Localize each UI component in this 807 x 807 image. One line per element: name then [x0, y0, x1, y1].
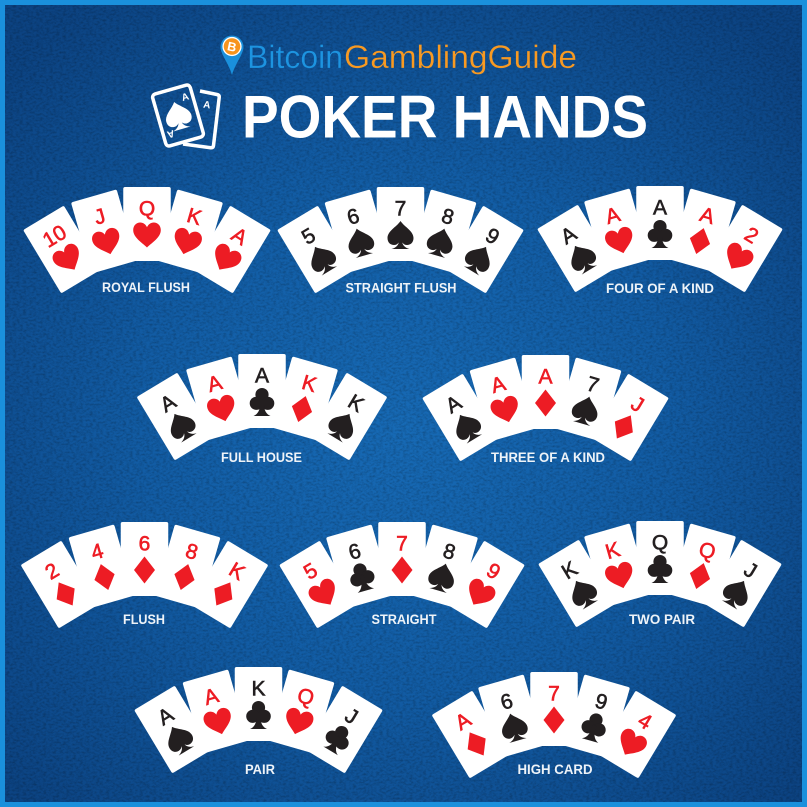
cards: three of a kind	[422, 355, 669, 461]
card: A of hearts: A	[201, 684, 221, 710]
card: 8 of spades	[410, 189, 477, 274]
card: 9 of clubs	[564, 674, 630, 759]
card: A of diamonds	[522, 355, 569, 429]
card: Q of hearts: Q	[295, 684, 317, 710]
cards: royal flush	[23, 187, 271, 293]
hand: high card	[432, 672, 676, 778]
card: 6 of diamonds: 6	[139, 532, 150, 556]
card: 4 of diamonds: 4	[89, 539, 106, 565]
card: 6 of spades: 6	[345, 204, 362, 230]
card: A of hearts	[182, 669, 249, 754]
hand: full house	[137, 354, 387, 465]
icon: map pin with bitcoin coin: B	[226, 39, 238, 55]
icon: playing cards: A	[166, 127, 176, 140]
card: 10 of hearts: 10	[39, 221, 71, 253]
card: Q of hearts	[268, 669, 335, 754]
card: A of spades: A	[442, 391, 466, 418]
card: J of hearts	[71, 189, 137, 274]
card: 4 of hearts: 4	[634, 709, 656, 735]
card: A of hearts: A	[488, 372, 508, 398]
card: K of diamonds	[190, 541, 268, 628]
card: A of spades: A	[154, 703, 178, 730]
cards: high card	[432, 672, 676, 778]
card: K of hearts	[584, 523, 650, 608]
card: J of clubs	[304, 686, 383, 773]
card: 5 of hearts	[279, 541, 358, 628]
card: 7 of spades	[377, 187, 424, 261]
label: high card: HIGH CARD	[518, 762, 593, 777]
card: Q of clubs: Q	[652, 532, 668, 554]
logo word: GamblingGuide: GamblingGuide	[344, 39, 577, 75]
card: 9 of hearts: 9	[482, 559, 504, 585]
card: 2 of hearts: 2	[740, 223, 762, 249]
card: 6 of spades	[324, 189, 391, 274]
label: royal flush: ROYAL FLUSH	[102, 280, 190, 295]
cards: pair	[134, 667, 383, 773]
card: Q of diamonds: Q	[696, 538, 718, 564]
cards: four of a kind	[537, 186, 783, 292]
card: 6 of clubs: 6	[346, 539, 364, 565]
card: A of clubs	[636, 186, 684, 260]
title: POKER HANDS	[242, 84, 648, 150]
card: 7 of spades	[555, 357, 622, 442]
card: 8 of spades: 8	[439, 204, 456, 230]
card: Q of hearts	[123, 187, 171, 261]
card: A of diamonds: A	[538, 366, 553, 388]
cards: straight	[279, 522, 525, 628]
card: 9 of clubs: 9	[592, 689, 610, 715]
card: J of spades	[703, 540, 782, 627]
card: 5 of hearts: 5	[300, 559, 322, 585]
card: 7 of spades: 7	[395, 198, 406, 220]
card: 2 of hearts	[704, 205, 783, 292]
card: K of hearts: K	[603, 538, 623, 564]
card: A of clubs: A	[255, 364, 269, 388]
label: four of a kind: FOUR OF A KIND	[606, 281, 714, 296]
card: 4 of diamonds	[68, 524, 135, 609]
hand: royal flush	[23, 187, 271, 295]
cards: two pair	[538, 521, 782, 627]
card: A of spades	[134, 686, 213, 773]
card: 6 of diamonds	[121, 522, 168, 596]
card: K of spades	[309, 373, 387, 460]
card: J of clubs: J	[341, 704, 362, 729]
card: A of spades	[422, 374, 501, 461]
card: A of spades: A	[156, 390, 180, 417]
label: three of a kind: THREE OF A KIND	[491, 450, 605, 465]
card: 9 of hearts	[446, 541, 525, 628]
card: 7 of diamonds	[530, 672, 578, 746]
card: A of clubs: A	[653, 196, 667, 220]
card: A of hearts: A	[227, 223, 251, 250]
card: 5 of spades	[277, 206, 356, 293]
card: 2 of diamonds: 2	[41, 559, 63, 585]
card: A of hearts	[469, 357, 536, 442]
card: K of diamonds: K	[299, 371, 319, 397]
card: 4 of hearts	[598, 691, 676, 778]
card: K of diamonds	[272, 356, 338, 441]
card: A of hearts	[192, 206, 271, 293]
label: pair: PAIR	[245, 762, 275, 777]
card: 7 of spades: 7	[584, 372, 601, 398]
card: 9 of spades	[445, 206, 524, 293]
card: A of hearts	[186, 356, 252, 441]
card: K of clubs: K	[251, 678, 266, 700]
cards: straight flush	[277, 187, 524, 293]
card: A of hearts: A	[603, 203, 623, 229]
card: 5 of spades: 5	[298, 224, 320, 250]
card: A of spades	[137, 373, 215, 460]
hand: straight flush	[277, 187, 524, 296]
hand: pair	[134, 667, 383, 777]
card: 8 of diamonds	[154, 524, 221, 609]
card: 8 of spades	[412, 524, 478, 609]
card: 7 of diamonds: 7	[396, 532, 408, 556]
icon: map pin with bitcoin coin	[220, 36, 244, 75]
card: Q of clubs	[636, 521, 684, 595]
card: 2 of diamonds	[21, 541, 99, 628]
label: straight: STRAIGHT	[372, 612, 437, 627]
card: J of hearts: J	[92, 205, 108, 230]
label: straight flush: STRAIGHT FLUSH	[346, 280, 456, 296]
cards: flush	[21, 522, 268, 628]
card: J of spades: J	[740, 558, 761, 583]
icon: playing cards: A	[202, 100, 211, 111]
card: 7 of diamonds: 7	[548, 682, 560, 706]
card: A of diamonds	[432, 691, 510, 778]
card: A of spades	[537, 205, 616, 292]
card: A of hearts: A	[205, 371, 225, 397]
card: Q of hearts: Q	[139, 198, 155, 220]
card: J of diamonds	[590, 374, 669, 461]
hand: two pair	[538, 521, 782, 627]
label: flush: FLUSH	[123, 612, 165, 627]
card: K of spades	[538, 540, 617, 627]
card: 9 of spades: 9	[481, 224, 503, 250]
hand: flush	[21, 522, 268, 628]
card: A of diamonds	[670, 188, 736, 273]
card: K of hearts	[157, 189, 223, 274]
card: A of hearts	[584, 188, 650, 273]
card: A of diamonds: A	[697, 203, 717, 229]
card: J of diamonds: J	[627, 392, 648, 417]
card: K of spades: K	[344, 390, 368, 417]
card: A of spades: A	[557, 222, 581, 249]
hand: straight	[279, 522, 525, 628]
label: full house: FULL HOUSE	[221, 450, 302, 465]
card: A of clubs	[238, 354, 286, 428]
hand: four of a kind	[537, 186, 783, 296]
card: 10 of hearts	[23, 206, 102, 293]
card: 6 of spades	[478, 674, 544, 759]
card: Q of diamonds	[670, 523, 736, 608]
logo: BitcoinGamblingGuide	[220, 36, 577, 75]
card: K of diamonds: K	[225, 558, 249, 585]
card: 8 of diamonds: 8	[183, 539, 200, 565]
card: 7 of diamonds	[378, 522, 426, 596]
card: 6 of clubs	[326, 524, 392, 609]
card: K of spades: K	[558, 557, 582, 584]
card: 6 of spades: 6	[498, 689, 516, 715]
card: K of hearts: K	[184, 204, 204, 230]
card: 8 of spades: 8	[440, 539, 458, 565]
logo word: Bitcoin: Bitcoin	[247, 39, 343, 75]
label: two pair: TWO PAIR	[629, 612, 695, 627]
card: K of clubs	[235, 667, 282, 741]
hand: three of a kind	[422, 355, 669, 465]
card: A of diamonds: A	[451, 708, 475, 735]
icon: playing cards	[152, 84, 219, 148]
icon: playing cards: A	[180, 91, 190, 104]
cards: full house	[137, 354, 387, 460]
